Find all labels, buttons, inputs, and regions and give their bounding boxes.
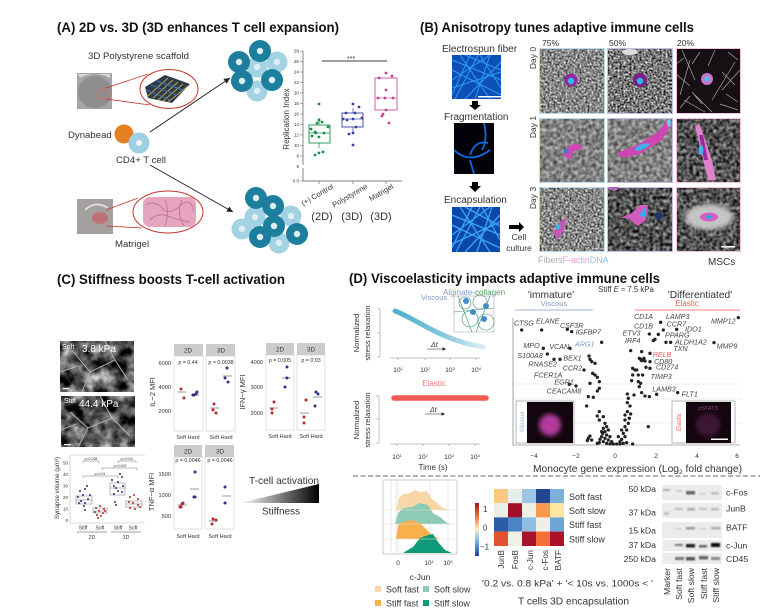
colorbar: −1: [480, 542, 490, 552]
heatmap: Stiff slow: [569, 534, 605, 544]
day labels: Day 3: [528, 187, 538, 209]
IFN-gamma chart: 2000: [251, 411, 263, 417]
volcano points and gene labels: CD274: [656, 364, 678, 372]
IL-2 chart: Soft Hard: [176, 435, 200, 441]
synapse volume chart: 50: [63, 460, 68, 466]
heatmap: JunB: [497, 549, 506, 569]
arrow to bottom cluster: [150, 165, 233, 212]
IL-2 chart: 6000: [159, 361, 171, 367]
replication index box plot: 20: [294, 90, 299, 96]
western blot: CD45: [726, 554, 748, 564]
y label: stress relaxation: [363, 392, 372, 448]
image: 50% day 3: [607, 187, 673, 252]
elastic relaxation chart: 2: [426, 454, 428, 458]
bottom cell cluster: [232, 187, 308, 254]
y label: stress relaxation: [363, 305, 372, 361]
heading C: (C) Stiffness boosts T-cell activation: [57, 272, 285, 287]
category labels: Soft: [96, 526, 105, 532]
icon: CD4 T cell: [128, 132, 150, 154]
viscous relaxation chart: 10: [445, 367, 453, 374]
synapse volume chart: p=0.002: [114, 464, 126, 468]
synapse volume chart: 0: [65, 518, 68, 523]
c-Jun ridgeline histogram: 5: [451, 560, 453, 564]
western blot: c-Fos: [726, 488, 748, 498]
axis label: Synapse volume (µm³): [54, 457, 61, 519]
TNF-alpha chart: 1500: [159, 472, 171, 478]
IFN-gamma chart: [238, 343, 325, 440]
histogram legend: Stiff slow: [434, 598, 470, 608]
volcano points and gene labels: LAMP3: [666, 313, 689, 321]
replication index box plot: 28: [294, 48, 299, 54]
category labels: Stiff: [114, 526, 123, 532]
inset: viscous pSTAT3: [516, 401, 574, 443]
volcano points and gene labels: ETV3: [623, 330, 641, 338]
SEM image: soft: 3.8 kPa: [82, 344, 116, 355]
hydrogel inset: [454, 295, 494, 332]
histogram legend: [375, 584, 471, 608]
volcano points and gene labels: LAMB3: [652, 385, 676, 393]
scaffold photo and magnified lattice: [77, 70, 198, 109]
heatmap: Soft slow: [569, 506, 606, 516]
inset: viscous pSTAT3: Viscous: [520, 412, 526, 432]
label: scaffold: 3D Polystyrene scaffold: [88, 51, 189, 61]
x tick labels: 0: [613, 453, 617, 460]
viscous relaxation chart: 2: [428, 367, 430, 371]
volcano points and gene labels: IRF4: [625, 337, 641, 345]
SEM image: stiff: [61, 396, 135, 447]
x tick labels: 6: [735, 453, 739, 460]
icon: dynabead: [114, 124, 134, 144]
label: electrospun fiber: Electrospun fiber: [442, 44, 518, 55]
TNF-alpha chart: Soft Hard: [176, 534, 200, 540]
panel: T cells 3D encapsulation: [375, 480, 748, 608]
significance bar: [322, 56, 387, 63]
IFN-gamma chart: Soft Hard: [299, 434, 323, 440]
time arrow: Δt: [430, 342, 439, 349]
day labels: Day 0: [528, 47, 538, 69]
elastic relaxation chart: 4: [478, 454, 480, 458]
y label: Normalized: [352, 314, 361, 352]
IL-2 chart: p = 0.0038: [208, 360, 234, 366]
histogram legend: Stiff fast: [386, 598, 419, 608]
electrospun fiber image: [452, 55, 501, 99]
synapse volume chart: 20: [63, 495, 68, 500]
elastic relaxation chart: 3: [452, 454, 454, 458]
volcano plot: [513, 285, 742, 476]
western blot: Stiff fast: [699, 567, 709, 599]
fiber density labels: 50%: [609, 38, 626, 48]
dimension labels: (2D): [311, 211, 333, 223]
image: 75% day 1: [539, 118, 605, 183]
viscous relaxation chart: 3: [453, 367, 455, 371]
x tick labels: 4: [695, 453, 699, 460]
western blot: [624, 484, 748, 603]
c-Jun ridgeline histogram: 10: [443, 560, 451, 567]
condition headers: Viscous: [541, 299, 568, 308]
elastic relaxation chart: 10: [444, 454, 452, 461]
volcano points and gene labels: EGR1: [554, 378, 574, 386]
colorbar: 0: [483, 524, 488, 532]
x axis label: 2: [679, 469, 683, 476]
arrow down: [469, 182, 481, 192]
gradient wedge: [240, 484, 319, 503]
inset: elastic pSTAT3: Elastic: [677, 413, 683, 431]
IL-2 chart: 2000: [159, 409, 171, 415]
label: Dynabead: Dynabead: [68, 130, 112, 141]
label: encapsulation: Encapsulation: [444, 195, 507, 206]
IFN-gamma chart: 3000: [251, 385, 263, 391]
volcano points and gene labels: CD1A: [634, 313, 653, 321]
volcano points and gene labels: ARG1: [574, 341, 595, 349]
category labels: Matrigel: [367, 182, 395, 203]
volcano points and gene labels: FCER1A: [534, 372, 562, 380]
volcano points and gene labels: FLT1: [682, 391, 698, 399]
western blot: BATF: [726, 522, 748, 532]
condition headers: [515, 285, 740, 310]
image: 50% day 1: [607, 118, 673, 183]
volcano points and gene labels: MMP9: [717, 342, 737, 350]
category labels: [79, 526, 138, 541]
replication index box plot: 14: [294, 122, 299, 127]
heatmap: c-Fos: [541, 550, 550, 570]
x axis label: Monocyte gene expression (Log: [533, 464, 678, 475]
label: T-cell activation: T-cell activation: [249, 476, 319, 487]
x label: Time (s): [418, 463, 448, 472]
label: stiffness: Stiffness: [262, 506, 300, 518]
significance bar: ***: [347, 56, 355, 63]
panel A: 2D vs 3D: [57, 20, 402, 254]
label: fragmentation: Fragmentation: [444, 112, 508, 123]
volcano points and gene labels: CD80: [654, 358, 672, 366]
volcano points and gene labels: IDO1: [685, 326, 702, 334]
image: 20% day 1: [676, 118, 741, 183]
category labels: 3D: [123, 535, 130, 541]
IFN-gamma chart: 3D: [307, 346, 315, 354]
viscous relaxation chart: [352, 305, 483, 374]
arrow right: [509, 222, 524, 232]
category labels: Stiff: [79, 526, 88, 532]
TNF-alpha chart: p = 0.0046: [207, 458, 233, 464]
image: 20% day 0: [676, 48, 741, 114]
volcano points and gene labels: TXN: [673, 345, 688, 353]
synapse volume chart: p=0.001: [121, 457, 133, 461]
replication index box plot: 8: [296, 154, 299, 158]
SEM image: stiff: Stiff: [64, 398, 76, 405]
x tick labels: −4: [530, 453, 538, 460]
synapse volume chart: 30: [63, 484, 68, 488]
heading D: (D) Viscoelasticity impacts adaptive immune cells: [349, 271, 660, 286]
IL-2 chart: Soft Hard: [209, 435, 233, 441]
western blot: Soft fast: [674, 567, 684, 600]
c-Jun ridgeline histogram: 4: [432, 560, 434, 564]
volcano points and gene labels: TIMP3: [651, 373, 672, 381]
heading B: (B) Anisotropy tunes adaptive immune cells: [420, 20, 694, 35]
category labels: 2D: [89, 535, 96, 541]
elastic relaxation chart: 10: [392, 454, 400, 461]
TNF-alpha chart: [147, 445, 234, 540]
label: alginate-collagen: Alginate-collagen: [443, 288, 505, 297]
label: Matrigel: Matrigel: [115, 239, 149, 250]
volcano points and gene labels: BEX1: [563, 355, 582, 363]
image: 75% day 3: [539, 187, 605, 252]
IFN-gamma chart: p = 0.005: [269, 358, 291, 364]
histogram legend: Soft slow: [434, 584, 471, 594]
dimension labels: (3D): [370, 211, 392, 223]
western blot: 37 kDa: [628, 540, 656, 550]
day labels: [528, 47, 538, 209]
image: 20% day 3: [676, 187, 741, 252]
elastic relaxation chart: 1: [400, 454, 402, 458]
arrow down: [469, 101, 481, 110]
replication index box plot: 0.0: [293, 178, 299, 184]
volcano points and gene labels: S100A8: [517, 352, 543, 360]
TNF-alpha chart: Soft Hard: [208, 534, 232, 540]
image: 75% day 0: [539, 48, 605, 114]
volcano points and gene labels: MPO: [523, 342, 540, 350]
SEM image: soft: [60, 341, 134, 392]
time arrow: Δt: [429, 407, 438, 414]
synapse volume chart: [54, 455, 145, 541]
fiber density labels: [542, 38, 694, 48]
inset: elastic pSTAT3: pSTAT3: [698, 406, 718, 412]
volcano points and gene labels: CTSG: [514, 320, 534, 328]
TNF-alpha chart: 2D: [184, 448, 192, 456]
axis label: IL−2 MFI: [148, 377, 157, 407]
condition headers: 'immature': [528, 290, 574, 301]
axis label: TNF−α MFI: [147, 473, 156, 511]
volcano points and gene labels: IGFBP7: [576, 329, 602, 337]
western blot: Marker: [662, 568, 672, 595]
replication index box plot: 26: [294, 59, 299, 64]
viscous relaxation chart: 10: [471, 367, 479, 374]
viscous relaxation chart: 10: [393, 367, 401, 374]
replication index box plot: 6: [296, 164, 299, 169]
synapse volume chart: 10: [63, 506, 68, 512]
TNF-alpha chart: 500: [162, 514, 171, 520]
IFN-gamma chart: p = 0.03: [301, 358, 321, 364]
arrow to top cluster: [150, 78, 230, 132]
axis label: IFN−γ MFI: [238, 374, 247, 410]
y label: [352, 392, 372, 448]
TNF-alpha chart: 3D: [216, 448, 224, 456]
label: cell culture: Cell: [512, 232, 526, 242]
panel B: anisotropy: [420, 20, 741, 268]
replication index box plot: 10: [294, 143, 299, 148]
viscous relaxation chart: 10: [420, 367, 428, 374]
volcano points and gene labels: CEACAM8: [547, 387, 581, 395]
IFN-gamma chart: Soft Hard: [268, 434, 292, 440]
encapsulated fiber image: [452, 207, 500, 252]
histogram legend: Soft fast: [386, 584, 420, 594]
IL-2 chart: 4000: [159, 385, 171, 391]
volcano points and gene labels: CCR7: [667, 321, 687, 329]
label: viscous: Viscous: [421, 293, 447, 302]
heatmap: FosB: [511, 549, 520, 569]
x tick labels: −2: [572, 453, 580, 460]
volcano points and gene labels: PPARG: [665, 331, 690, 339]
TNF-alpha chart: 1000: [159, 493, 171, 499]
dimension labels: (3D): [341, 211, 363, 223]
y label: [352, 305, 372, 361]
replication index box plot: 24: [294, 70, 299, 74]
SEM image: soft: Soft: [62, 344, 75, 351]
western blot: c-Jun: [726, 540, 747, 550]
c-Jun ridgeline histogram: c-Jun: [410, 572, 431, 582]
day labels: Day 1: [528, 116, 538, 138]
replication index box plot: 18: [294, 101, 299, 106]
viscous relaxation chart: 4: [479, 367, 481, 371]
western blot: 250 kDa: [624, 554, 656, 564]
panel C: stiffness: [54, 272, 325, 541]
volcano points and gene labels: VCAN: [549, 343, 570, 351]
western blot: 15 kDa: [628, 526, 656, 536]
volcano points and gene labels: MMP12: [711, 318, 736, 326]
heading A: (A) 2D vs. 3D (3D enhances T cell expansion): [57, 20, 339, 35]
heatmap: Stiff fast: [569, 520, 602, 530]
volcano points and gene labels: CSF3R: [560, 322, 583, 330]
western blot: 50 kDa: [628, 484, 656, 494]
stain legend: FibersF-actinDNA: [538, 255, 609, 265]
microscopy grid: [539, 48, 741, 252]
y label: Normalized: [352, 401, 361, 439]
heatmap: [494, 489, 606, 570]
volcano points and gene labels: RELB: [653, 351, 672, 359]
synapse volume chart: p=0.01: [95, 472, 105, 476]
fragmented fiber image: [454, 123, 494, 174]
category labels: (+) Control: [300, 182, 335, 208]
elastic relaxation chart: 10: [470, 454, 478, 461]
top cell cluster: [228, 40, 288, 102]
label: CD4 T cell: CD4+ T cell: [116, 155, 166, 166]
inset: elastic pSTAT3: [672, 401, 735, 443]
condition caption: '0.2 vs. 0.8 kPa' + '< 10s vs. 1000s < ': [482, 578, 653, 588]
colorbar: 1: [483, 505, 488, 514]
western blot: Soft slow: [686, 567, 696, 603]
image: 50% day 0: [607, 48, 673, 114]
x tick labels: [530, 453, 739, 460]
synapse volume chart: 40: [63, 472, 68, 477]
heatmap: BATF: [554, 550, 563, 570]
IL-2 chart: 2D: [184, 348, 192, 354]
label: elastic: Elastic: [422, 379, 446, 388]
category labels: Soft: [129, 526, 138, 532]
heatmap: c-Jun: [526, 550, 535, 570]
volcano points and gene labels: CCR2: [563, 364, 582, 372]
elastic relaxation chart: [352, 392, 486, 472]
IFN-gamma chart: 4000: [251, 360, 263, 366]
category labels: Polystyrene: [331, 182, 369, 209]
label: MSCs: MSCs: [708, 257, 735, 268]
label: cell culture: [506, 232, 532, 253]
matrigel photo and magnified gel: [77, 191, 203, 234]
condition headers: Elastic: [675, 299, 699, 308]
elastic relaxation chart: 10: [418, 454, 426, 461]
IFN-gamma chart: 2D: [276, 346, 284, 354]
fiber density labels: 75%: [542, 38, 559, 48]
fiber density labels: 20%: [677, 38, 694, 48]
replication index box plot: [282, 48, 402, 223]
volcano points and gene labels: RNASE2: [528, 361, 557, 369]
replication index box plot: 16: [294, 112, 299, 116]
c-Jun ridgeline histogram: 0: [396, 560, 400, 567]
x axis label: fold change): [683, 464, 742, 475]
volcano points and gene labels: ALDH1A2: [674, 339, 707, 347]
label: cell culture: culture: [506, 243, 532, 253]
TNF-alpha chart: p = 0.0046: [175, 458, 201, 464]
category labels: [300, 182, 395, 209]
c-Jun ridgeline histogram: 10: [424, 560, 432, 567]
volcano points and gene labels: CD1B: [634, 322, 653, 330]
viscous relaxation chart: 1: [401, 367, 403, 371]
x tick labels: 2: [654, 453, 658, 460]
volcano points and gene labels: [514, 313, 740, 446]
IL-2 chart: [148, 344, 235, 441]
condition headers: Stiff E ≈ 7.5 kPa: [598, 285, 655, 294]
heatmap: Soft fast: [569, 492, 603, 502]
SEM image: stiff: 44.4 kPa: [79, 399, 119, 410]
c-Jun ridgeline histogram: [383, 480, 457, 582]
condition headers: 'Differentiated': [668, 290, 732, 301]
western blot: 37 kDa: [628, 508, 656, 518]
IL-2 chart: 3D: [217, 348, 225, 354]
replication index box plot: 12: [294, 132, 299, 138]
western blot: JunB: [726, 504, 746, 514]
IL-2 chart: p = 0.44: [178, 360, 198, 366]
synapse volume chart: p=0.008: [85, 457, 97, 461]
replication index box plot: 22: [294, 80, 299, 85]
western blot: Stiff slow: [711, 567, 721, 603]
volcano points and gene labels: ELANE: [536, 318, 560, 326]
axis label: Replication Index: [282, 88, 291, 150]
colorbar: [475, 503, 490, 556]
panel D: viscoelasticity: [349, 271, 742, 476]
dimension labels: [311, 211, 392, 223]
encapsulation caption: T cells 3D encapsulation: [518, 596, 629, 608]
